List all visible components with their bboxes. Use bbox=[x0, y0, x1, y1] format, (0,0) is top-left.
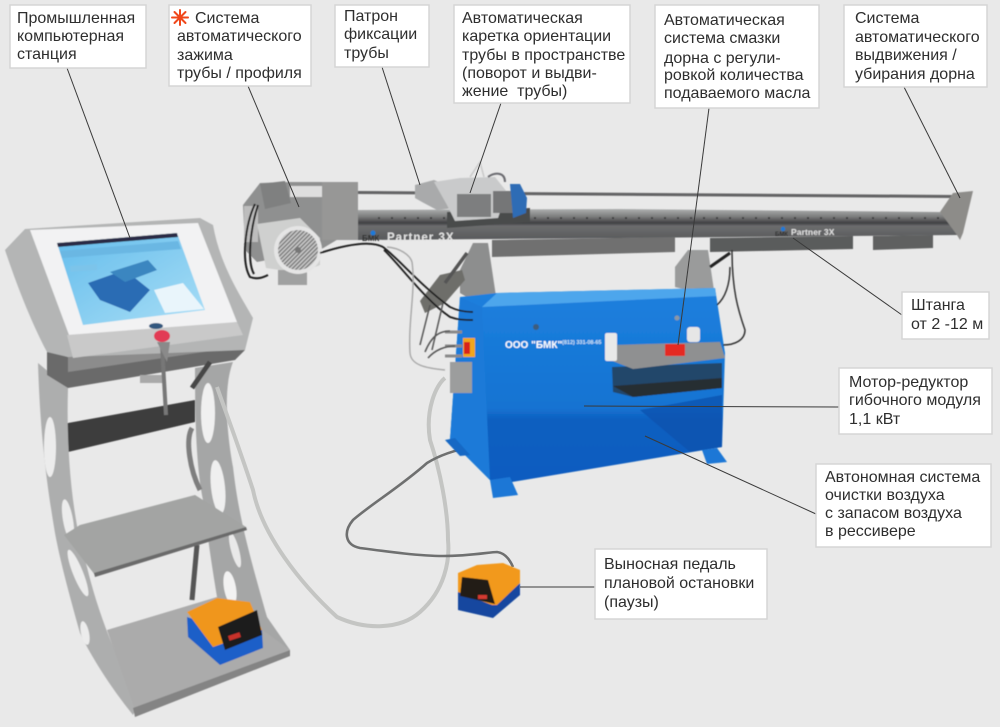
electrical switch bbox=[463, 338, 475, 357]
label: rod length bbox=[902, 292, 989, 339]
foot pedal on stand bbox=[187, 598, 263, 665]
rear right lower strut bbox=[192, 545, 197, 600]
label: computer station bbox=[10, 5, 146, 68]
label: gear motor: Мотор-редуктор bbox=[849, 374, 968, 391]
monitor lower lip bbox=[67, 322, 243, 358]
left leg bbox=[38, 363, 140, 715]
main beam bbox=[358, 209, 957, 240]
icon: red asterisk bbox=[172, 10, 188, 25]
tube bender machine: БМК bbox=[775, 232, 788, 238]
support left bbox=[460, 243, 497, 305]
lubrication tank bbox=[605, 327, 725, 397]
label: lubrication: Автоматическая bbox=[664, 12, 785, 29]
label: pedal bbox=[595, 549, 767, 619]
label: pedal: (паузы) bbox=[604, 594, 659, 611]
support right bbox=[675, 250, 715, 297]
label: rod length: от 2 -12 м bbox=[911, 316, 983, 333]
label: chuck bbox=[335, 5, 429, 67]
logo bbox=[149, 323, 163, 329]
label: computer station: станция bbox=[17, 46, 77, 63]
pedal cable bbox=[347, 447, 513, 567]
label: carriage: жение трубы) bbox=[462, 83, 567, 100]
control station stand bbox=[5, 218, 290, 717]
label: carriage bbox=[454, 5, 630, 103]
blue body left face bbox=[450, 297, 490, 480]
stand cable bbox=[192, 362, 210, 388]
grey power cable bbox=[217, 378, 448, 626]
black hoses bbox=[320, 244, 473, 320]
partner labels: Partner 3X bbox=[387, 232, 455, 244]
label: mandrel: автоматического bbox=[855, 29, 980, 46]
label: air cleaning: в рессивере bbox=[825, 523, 916, 540]
blue body bbox=[450, 288, 725, 482]
right hoses bbox=[717, 250, 745, 345]
right leg bbox=[195, 362, 290, 650]
bottom shelf bbox=[107, 597, 290, 710]
label: clamping system: Система bbox=[195, 10, 260, 27]
blue body shadow bbox=[640, 395, 722, 452]
clamping head bbox=[243, 181, 358, 285]
label: clamping system: трубы / профиля bbox=[177, 65, 302, 82]
label: lubrication: подаваемого масла bbox=[664, 85, 811, 102]
label: clamping system: зажима bbox=[177, 47, 233, 64]
screen table bbox=[154, 283, 204, 313]
feet bbox=[490, 477, 518, 498]
label: gear motor: 1,1 кВт bbox=[849, 411, 901, 428]
crossbar between legs bbox=[45, 400, 195, 456]
rod end bracket bbox=[940, 191, 973, 240]
label: air cleaning: Автономная система bbox=[825, 469, 980, 486]
brand marks: БМК bbox=[362, 234, 379, 243]
blue body top highlight bbox=[482, 288, 716, 307]
label: air cleaning: с запасом воздуха bbox=[825, 505, 962, 522]
emergency stop and handle bbox=[162, 345, 166, 415]
light hose bbox=[387, 247, 445, 370]
label: mandrel: убирания дорна bbox=[855, 66, 975, 83]
label: lubrication: система смазки bbox=[664, 30, 780, 47]
callout lines bbox=[67, 67, 960, 587]
label: pedal: Выносная педаль bbox=[604, 556, 736, 573]
label: lubrication bbox=[655, 5, 819, 108]
tube bender machine bbox=[243, 162, 973, 498]
left leg holes bbox=[44, 417, 92, 646]
pneumatic cylinder bbox=[420, 270, 465, 313]
label: air cleaning bbox=[816, 464, 991, 547]
middle shelf bbox=[64, 495, 246, 575]
label: gear motor: гибочного модуля bbox=[849, 392, 981, 409]
label: rod length: Штанга bbox=[911, 297, 965, 314]
orientation carriage bbox=[415, 162, 530, 228]
rear thin rod bbox=[358, 191, 953, 198]
label: air cleaning: очистки воздуха bbox=[825, 487, 945, 504]
label: carriage: каретка ориентации bbox=[462, 28, 611, 45]
label: clamping system bbox=[169, 5, 311, 86]
label: computer station: компьютерная bbox=[17, 28, 124, 45]
label: carriage: (поворот и выдви- bbox=[462, 65, 597, 82]
monitor frame bbox=[5, 218, 253, 357]
label: computer station: Промышленная bbox=[17, 10, 135, 27]
label: carriage: Автоматическая bbox=[462, 10, 583, 27]
partner label right: Partner 3X bbox=[791, 227, 835, 237]
monitor under-body bbox=[47, 335, 245, 388]
label: lubrication: дорна с регули- bbox=[664, 50, 781, 67]
label: lubrication: ровкой количества bbox=[664, 67, 804, 84]
touch screen bbox=[57, 233, 205, 325]
screen machine model bbox=[88, 270, 150, 312]
label: chuck: трубы bbox=[344, 45, 389, 62]
company text: ООО "БМК" bbox=[505, 340, 562, 351]
label: gear motor bbox=[839, 368, 992, 434]
label: chuck: Патрон bbox=[344, 8, 398, 25]
monitor white face bbox=[30, 223, 237, 343]
bolt marks bbox=[533, 324, 539, 330]
label: pedal: плановой остановки bbox=[604, 575, 754, 592]
lower strips bbox=[492, 237, 675, 257]
phone text: (812) 331-08-65 bbox=[562, 340, 601, 346]
right leg holes bbox=[201, 383, 244, 606]
label: mandrel bbox=[844, 5, 987, 87]
label: mandrel: Система bbox=[855, 10, 920, 27]
electrical box bbox=[450, 362, 472, 393]
beam holes row bbox=[378, 217, 950, 219]
label: mandrel: выдвижения / bbox=[855, 47, 957, 64]
label: carriage: трубы в пространстве bbox=[462, 47, 625, 64]
side connectors bbox=[445, 332, 462, 356]
label: chuck: фиксации bbox=[344, 26, 417, 43]
label: clamping system: автоматического bbox=[177, 28, 302, 45]
pedal bbox=[458, 563, 520, 618]
side hoses bbox=[420, 303, 455, 358]
